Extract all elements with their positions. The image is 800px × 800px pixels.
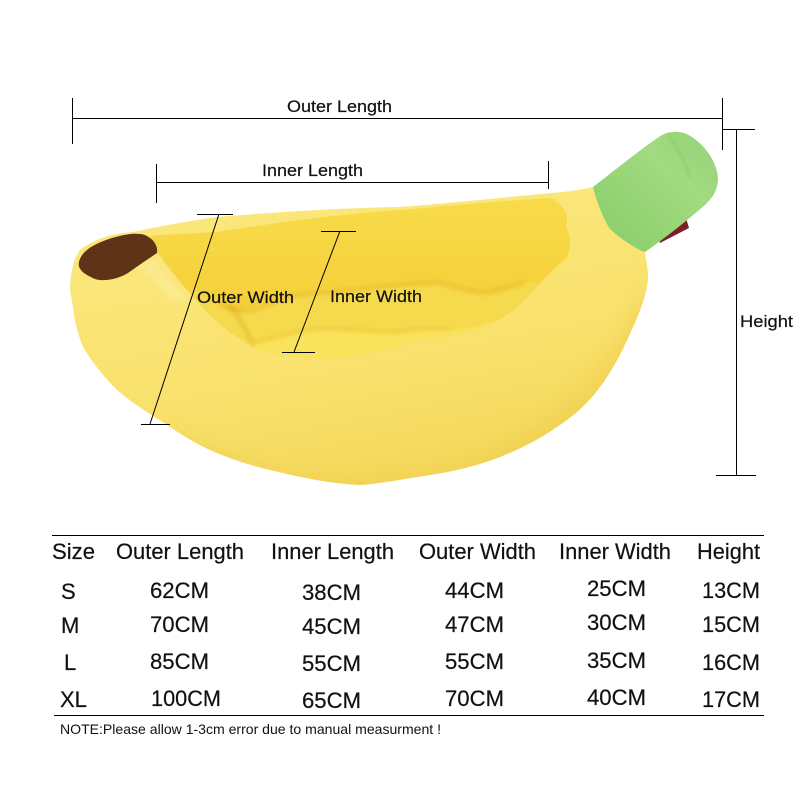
table header: Size	[52, 539, 95, 564]
size table	[52, 536, 764, 716]
inner length column: 45CM	[302, 614, 361, 639]
table header: Outer Width	[419, 539, 536, 564]
note: NOTE:Please allow 1-3cm error due to manual measurment !	[60, 721, 441, 737]
banana body	[70, 187, 648, 485]
height column	[702, 578, 760, 712]
brown tip	[79, 234, 157, 280]
inner width column: 40CM	[587, 685, 646, 710]
body shading	[176, 296, 645, 485]
outer width column: 44CM	[445, 578, 504, 603]
inner width column: 25CM	[587, 576, 646, 601]
dimension: height: Height	[740, 312, 793, 331]
inner width column	[587, 576, 646, 710]
dimension: inner width	[282, 231, 422, 352]
inner length column	[302, 580, 361, 713]
inner length column: 55CM	[302, 651, 361, 676]
green stem	[593, 132, 718, 252]
lower cushion	[254, 322, 495, 358]
dimension: outer length	[72, 97, 722, 150]
highlight near tip	[140, 258, 190, 300]
inner width column: 30CM	[587, 610, 646, 635]
height column: 15CM	[702, 612, 760, 637]
size column	[60, 579, 87, 712]
dimension: inner length	[156, 161, 548, 203]
table header: Inner Length	[271, 539, 394, 564]
height column: 13CM	[702, 578, 760, 603]
outer length column: 85CM	[150, 649, 209, 674]
outer length column: 62CM	[150, 578, 209, 603]
size column: L	[64, 650, 76, 675]
dimension: outer width	[141, 214, 294, 424]
outer width column	[445, 578, 504, 711]
table header	[52, 539, 760, 564]
dimension: inner width: Inner Width	[330, 287, 422, 306]
size column: M	[61, 613, 79, 638]
inner length column: 38CM	[302, 580, 361, 605]
inner cavity back wall and cushions	[150, 198, 570, 358]
outer length column	[150, 578, 221, 711]
dimension: outer width: Outer Width	[197, 288, 294, 307]
table header: Inner Width	[559, 539, 671, 564]
table header: Height	[697, 539, 760, 564]
upper cushion	[192, 282, 540, 348]
outer width column: 70CM	[445, 686, 504, 711]
table header: Outer Length	[116, 539, 244, 564]
infographic: banana pet bed size chart	[52, 98, 793, 734]
banana bed illustration	[70, 132, 718, 500]
height column: 17CM	[702, 687, 760, 712]
outer width column: 55CM	[445, 649, 504, 674]
dimension: inner length: Inner Length	[262, 161, 363, 180]
inner width column: 35CM	[587, 648, 646, 673]
dimension: height	[716, 129, 793, 476]
red tag	[658, 218, 689, 243]
outer width column: 47CM	[445, 612, 504, 637]
outer length column: 100CM	[151, 686, 221, 711]
size column: S	[61, 579, 76, 604]
dimension: outer length: Outer Length	[287, 97, 392, 116]
height column: 16CM	[702, 650, 760, 675]
cushion creases	[222, 282, 525, 311]
inner length column: 65CM	[302, 688, 361, 713]
stem crease	[668, 136, 690, 178]
outer length column: 70CM	[150, 612, 209, 637]
size column: XL	[60, 687, 87, 712]
